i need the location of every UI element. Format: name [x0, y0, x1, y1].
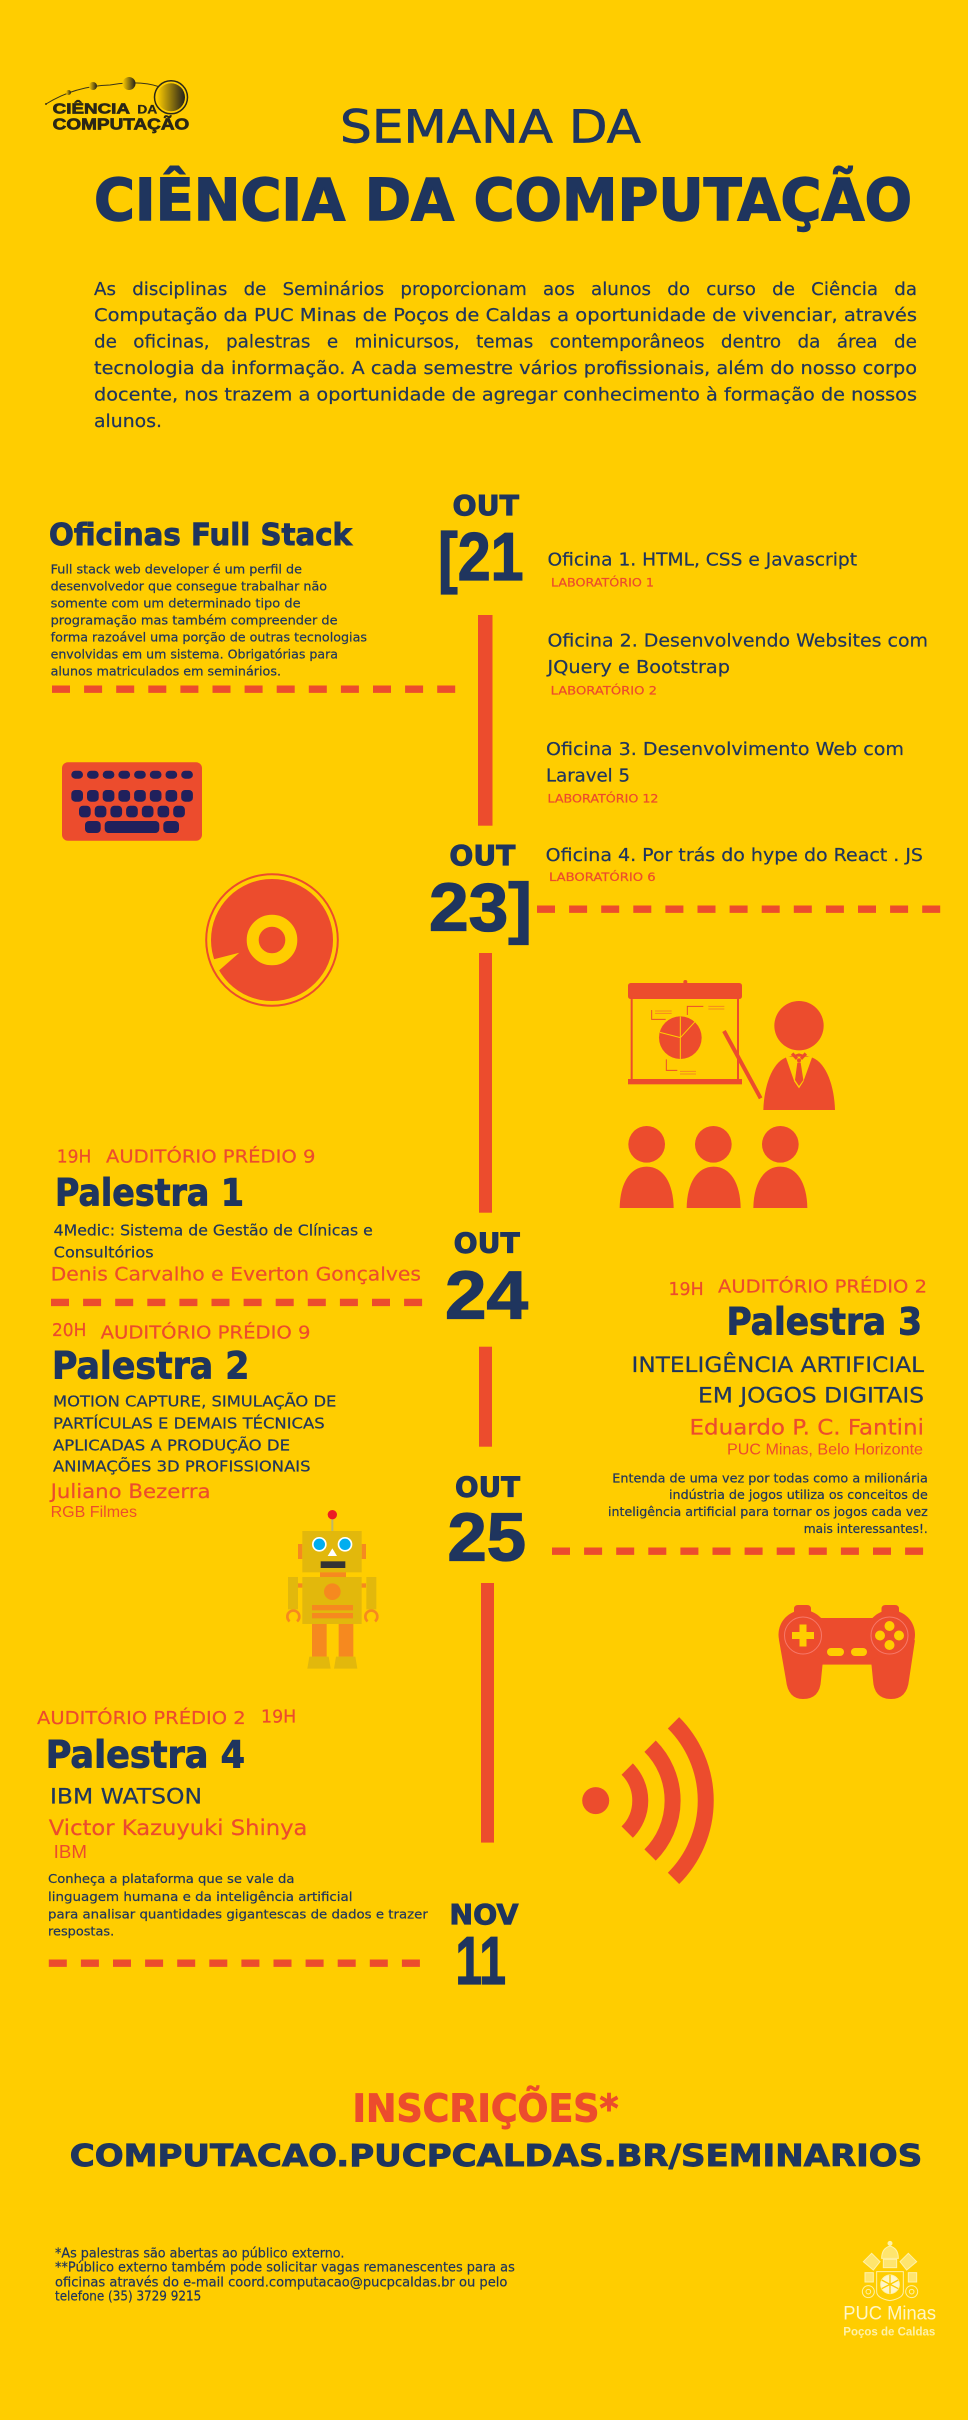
- icon: game controller: [778, 1605, 915, 1699]
- panel: Palestra 3: PUC Minas, Belo Horizonte: [727, 1442, 923, 1459]
- panel: Palestra 3: EM JOGOS DIGITAIS: [698, 1384, 924, 1408]
- workshop 2: [546, 631, 928, 698]
- logo: Ciência da Computação: COMPUTAÇÃO: [53, 113, 189, 133]
- text block: Full stack description: Full stack web developer é um perfil de: [51, 561, 302, 576]
- date: OUT 23: [429, 840, 532, 946]
- text block: Full stack description: alunos matriculados em seminários.: [51, 663, 281, 678]
- date: OUT 21: [21: [438, 519, 524, 595]
- icon: disc: [206, 874, 338, 1006]
- panel: Oficinas Full Stack: [49, 518, 367, 678]
- date: OUT 25: OUT: [455, 1472, 520, 1504]
- title: [94, 101, 912, 234]
- panel: Palestra 3: AUDITÓRIO PRÉDIO 2: [718, 1276, 927, 1298]
- text block: Full stack description: somente com um determinado tipo de: [51, 595, 301, 610]
- panel: Palestra 1: AUDITÓRIO PRÉDIO 9: [106, 1146, 315, 1168]
- intro paragraph: As disciplinas de Seminários proporcionam aos alunos do curso de Ciência da: [94, 280, 917, 300]
- panel: Palestra 3: 19H: [668, 1279, 704, 1300]
- date: OUT 21: [438, 490, 524, 595]
- footnote: *As palestras são abertas ao público externo.: [55, 2246, 344, 2261]
- timeline bar 4: [481, 1583, 494, 1843]
- panel: Palestra 4: [37, 1706, 429, 1939]
- panel: Palestra 4: IBM WATSON: [50, 1784, 202, 1808]
- call to action: inscrições: INSCRIÇÕES*: [352, 2085, 618, 2132]
- date: NOV 11: 11: [456, 1923, 506, 1999]
- icon: robot: [287, 1510, 377, 1669]
- workshop 1: LABORATÓRIO 1: [551, 575, 654, 590]
- timeline bar 2: [479, 953, 492, 1213]
- footnote: oficinas através do e-mail coord.computacao@pucpcaldas.br ou pelo: [55, 2276, 507, 2291]
- intro paragraph: de oficinas, palestras e minicursos, temas contemporâneos dentro da área de: [94, 333, 917, 353]
- text block: Full stack description: [51, 561, 367, 678]
- panel: Palestra 3: Entenda de uma vez por todas como a milionária: [612, 1471, 928, 1486]
- intro paragraph: [94, 280, 917, 432]
- panel: Palestra 1: 4Medic: Sistema de Gestão de Clínicas e: [54, 1223, 373, 1240]
- panel: Palestra 1: 19H: [57, 1147, 91, 1168]
- timeline bar 1: [478, 615, 492, 826]
- date: OUT 23: OUT: [449, 840, 516, 872]
- logo: Ciência da Computação: CIÊNCIA: [53, 99, 130, 117]
- workshop 3: [546, 739, 904, 806]
- logo: PUC Minas: [843, 2241, 936, 2339]
- panel: Palestra 4: AUDITÓRIO PRÉDIO 2: [37, 1707, 246, 1729]
- text block: Full stack description: programação mas também compreender de: [51, 612, 338, 627]
- intro paragraph: docente, nos trazem a oportunidade de agregar conhecimento à formação de nossos: [94, 386, 917, 406]
- date: OUT 24: OUT: [454, 1228, 520, 1260]
- heading: Oficinas Full Stack: Oficinas Full Stack: [49, 518, 353, 553]
- logo: PUC Minas: PUC Minas: [843, 2303, 936, 2324]
- date: NOV 11: [449, 1899, 519, 1999]
- logo: Ciência da Computação: DA: [137, 102, 158, 116]
- panel: Palestra 1: Consultórios: [54, 1245, 154, 1262]
- title: CIÊNCIA DA COMPUTAÇÃO: [94, 165, 912, 234]
- panel: Palestra 2: ANIMAÇÕES 3D PROFISSIONAIS: [53, 1457, 310, 1476]
- panel: Palestra 2: PARTÍCULAS E DEMAIS TÉCNICAS: [53, 1414, 325, 1433]
- logo: PUC Minas: Poços de Caldas: [843, 2325, 936, 2339]
- date: OUT 23: 23]: [429, 870, 532, 946]
- footnote: **Público externo também pode solicitar vagas remanescentes para as: [55, 2261, 515, 2276]
- workshop list: [546, 550, 928, 884]
- text block: Full stack description: envolvidas em um sistema. Obrigatórias para: [51, 646, 338, 661]
- date: OUT 25: 25: [448, 1500, 526, 1576]
- workshop 4: [546, 845, 923, 884]
- intro paragraph: alunos.: [94, 412, 162, 432]
- workshop 1: [548, 550, 857, 590]
- panel: Palestra 1: Palestra 1: [55, 1172, 244, 1215]
- call to action: inscrições: COMPUTACAO.PUCPCALDAS.BR/SEMINARIOS: [70, 2139, 922, 2174]
- date: OUT 21: OUT: [452, 490, 519, 522]
- panel: Palestra 3: Palestra 3: [726, 1301, 922, 1344]
- panel: Palestra 4: IBM: [54, 1842, 87, 1862]
- intro paragraph: Computação da PUC Minas de Poços de Caldas a oportunidade de vivenciar, através: [94, 306, 917, 326]
- panel: Palestra 3: mais interessantes!.: [804, 1521, 928, 1536]
- footnote: [55, 2246, 515, 2305]
- panel: Palestra 2: MOTION CAPTURE, SIMULAÇÃO DE: [53, 1392, 336, 1411]
- workshop 1: Oficina 1. HTML, CSS e Javascript: [548, 550, 857, 571]
- panel: Palestra 2: Juliano Bezerra: [48, 1480, 210, 1503]
- workshop 2: JQuery e Bootstrap: [546, 657, 730, 678]
- call to action: inscrições: [70, 2085, 922, 2174]
- timeline bar 3: [479, 1347, 492, 1447]
- text block: Full stack description: forma razoável uma porção de outras tecnologias: [51, 629, 367, 644]
- date: OUT 24: [445, 1228, 528, 1333]
- panel: Palestra 3: inteligência artificial para tornar os jogos cada vez: [608, 1504, 928, 1519]
- panel: Palestra 2: AUDITÓRIO PRÉDIO 9: [101, 1321, 310, 1343]
- panel: Palestra 2: Palestra 2: [52, 1344, 249, 1387]
- icon: keyboard: [62, 762, 202, 841]
- workshop 4: Oficina 4. Por trás do hype do React . JS: [546, 845, 923, 866]
- panel: Palestra 3: indústria de jogos utiliza os conceitos de: [669, 1487, 928, 1502]
- panel: Palestra 3: Eduardo P. C. Fantini: [690, 1416, 924, 1440]
- icon: signal waves: [582, 1723, 706, 1878]
- panel: Palestra 2: APLICADAS A PRODUÇÃO DE: [53, 1436, 290, 1455]
- workshop 3: LABORATÓRIO 12: [548, 791, 658, 806]
- panel: Palestra 4: Victor Kazuyuki Shinya: [49, 1816, 307, 1840]
- panel: Palestra 4: 19H: [261, 1706, 296, 1727]
- footnote: telefone (35) 3729 9215: [55, 2290, 201, 2305]
- workshop 4: LABORATÓRIO 6: [549, 869, 656, 884]
- panel: Palestra 4: para analisar quantidades gigantescas de dados e trazer: [48, 1906, 429, 1921]
- panel: Palestra 1: Denis Carvalho e Everton Gonçalves: [51, 1264, 421, 1286]
- workshop 2: Oficina 2. Desenvolvendo Websites com: [548, 631, 928, 652]
- logo: Ciência da Computação: [45, 77, 189, 133]
- workshop 3: Laravel 5: [546, 766, 630, 787]
- panel: Palestra 4: Conheça a plataforma que se vale da: [48, 1871, 294, 1886]
- workshop 2: LABORATÓRIO 2: [551, 683, 657, 698]
- workshop 3: Oficina 3. Desenvolvimento Web com: [546, 739, 904, 760]
- panel: Palestra 1: [51, 1146, 421, 1286]
- text block: Full stack description: desenvolvedor que consegue trabalhar não: [51, 578, 327, 593]
- intro paragraph: tecnologia da informação. A cada semestre vários profissionais, além do nosso corpo: [94, 359, 917, 379]
- panel: Palestra 4: Palestra 4: [46, 1734, 245, 1776]
- panel: Palestra 2: 20H: [52, 1320, 86, 1341]
- panel: Palestra 4: linguagem humana e da inteligência artificial: [48, 1889, 352, 1904]
- date: NOV 11: NOV: [449, 1899, 519, 1931]
- panel: Palestra 2: [48, 1320, 336, 1521]
- date: OUT 24: 24: [445, 1257, 528, 1333]
- panel: Palestra 3: [608, 1276, 928, 1536]
- panel: Palestra 2: RGB Filmes: [51, 1504, 137, 1521]
- title: SEMANA DA: [340, 101, 641, 154]
- icon: presentation with audience: [620, 980, 835, 1208]
- panel: Palestra 3: INTELIGÊNCIA ARTIFICIAL: [632, 1352, 924, 1377]
- panel: Palestra 4: respostas.: [48, 1924, 114, 1939]
